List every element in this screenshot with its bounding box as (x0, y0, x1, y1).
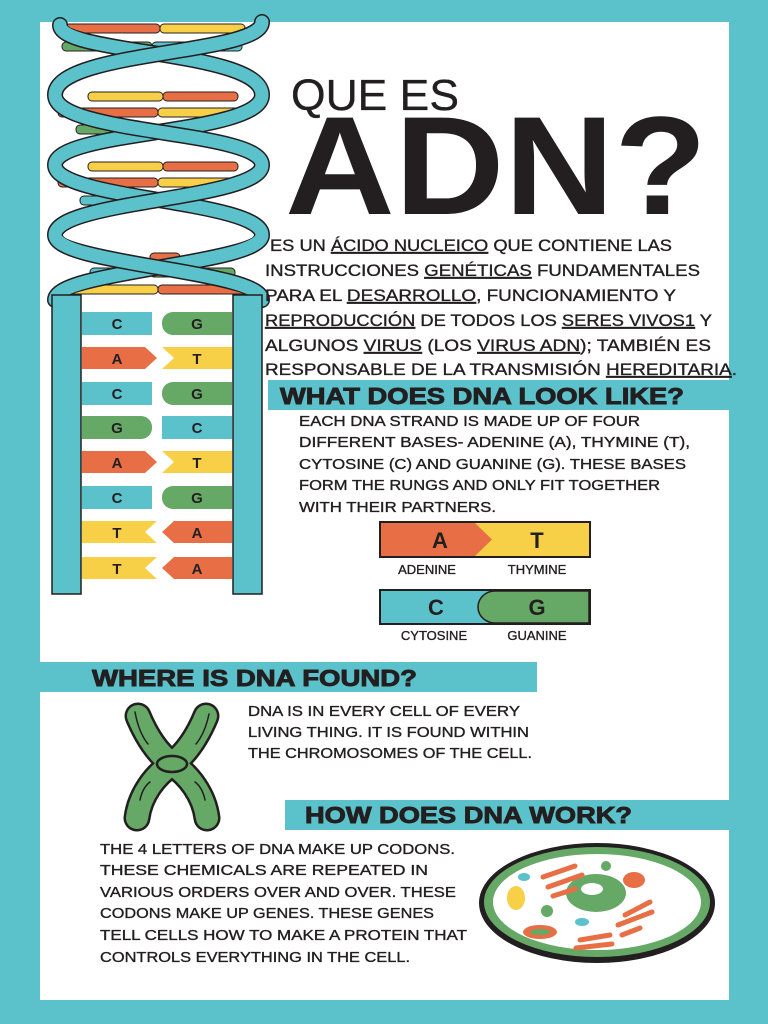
diagram: C-G pair: GUANINE (507, 628, 567, 643)
ladder rungs: G (191, 316, 203, 333)
text block: bases: DIFFERENT BASES- ADENINE (A), THYMINE (T), (299, 435, 690, 451)
ladder rungs: C (112, 316, 123, 333)
diagram: A-T pair: ADENINE (398, 562, 456, 577)
ladder rungs: G (111, 420, 123, 437)
text block: bases: FORM THE RUNGS AND ONLY FIT TOGETHER (299, 478, 660, 494)
text block: how (100, 842, 467, 966)
text block: how: CODONS MAKE UP GENES. THESE GENES (100, 906, 434, 922)
ladder rungs: C (192, 420, 203, 437)
heading: what does DNA look like: WHAT DOES DNA LOOK LIKE? (280, 383, 684, 409)
icon: chromosome (135, 712, 209, 818)
heading: how does DNA work (285, 800, 729, 830)
diagram: A-T pair: T (530, 528, 544, 553)
text block: how: THESE CHEMICALS ARE REPEATED IN (100, 863, 428, 879)
ladder rungs (82, 312, 232, 579)
ladder rungs: G (191, 490, 203, 507)
heading: where is DNA found (40, 662, 537, 692)
ladder rungs: T (112, 525, 122, 542)
ladder rungs: A (192, 561, 203, 578)
ladder rungs: C (112, 490, 123, 507)
ladder rungs: A (112, 351, 123, 368)
text block: definition (265, 236, 737, 379)
ladder rungs: T (192, 455, 202, 472)
text block: definition: RESPONSABLE DE LA TRANSMISIÓN HEREDITARIA . (265, 360, 737, 379)
text block: where: LIVING THING. IT IS FOUND WITHIN (248, 725, 529, 741)
helix rungs (58, 24, 258, 294)
text block: bases (299, 414, 690, 516)
helix strands (55, 22, 262, 300)
ladder rungs: A (112, 455, 123, 472)
text block: definition: PARA EL DESARROLLO , FUNCIONAMIENTO Y (265, 286, 676, 305)
text block: bases: CYTOSINE (C) AND GUANINE (G). THESE BASES (299, 457, 686, 473)
diagram: C-G pair: C (428, 595, 444, 620)
text block: where: THE CHROMOSOMES OF THE CELL. (248, 746, 532, 762)
diagram: C-G pair: CYTOSINE (401, 628, 467, 643)
text block: definition: ALGUNOS VIRUS (LOS VIRUS ADN ); TAMBIÉN ES (265, 336, 711, 355)
text block: how: VARIOUS ORDERS OVER AND OVER. THESE (100, 885, 456, 901)
diagram: C-G pair: G (528, 595, 546, 620)
heading: what does DNA look like (268, 380, 729, 410)
heading: where is DNA found: WHERE IS DNA FOUND? (92, 665, 417, 691)
ladder rails (52, 295, 81, 594)
ladder rungs: T (112, 561, 122, 578)
ladder rungs: A (192, 525, 203, 542)
diagram: C-G pair (380, 590, 590, 643)
ladder rungs: G (191, 386, 203, 403)
title: ADN? (285, 87, 707, 244)
text block: definition: REPRODUCCIÓN DE TODOS LOS SERES VIVOS1 Y (265, 311, 712, 330)
text block: bases: EACH DNA STRAND IS MADE UP OF FOUR (299, 414, 640, 430)
text block: where: DNA IS IN EVERY CELL OF EVERY (248, 704, 520, 720)
ladder rungs: C (112, 386, 123, 403)
title: QUE ES (291, 71, 459, 120)
icon: DNA double helix and ladder (52, 22, 262, 594)
text block: how: THE 4 LETTERS OF DNA MAKE UP CODONS. (100, 842, 455, 858)
text block: definition: INSTRUCCIONES GENÉTICAS FUNDAMENTALES (265, 261, 700, 280)
text block: how: TELL CELLS HOW TO MAKE A PROTEIN THAT (100, 928, 467, 944)
text block: how: CONTROLS EVERYTHING IN THE CELL. (100, 950, 410, 966)
text block: where (248, 704, 532, 762)
diagram: A-T pair: THYMINE (508, 562, 567, 577)
diagram: A-T pair: A (432, 528, 448, 553)
diagram: A-T pair (380, 522, 590, 577)
ladder rungs: T (192, 351, 202, 368)
icon: cell (479, 843, 715, 963)
heading: how does DNA work: HOW DOES DNA WORK? (305, 802, 632, 828)
text block: bases: WITH THEIR PARTNERS. (299, 500, 496, 516)
text block: definition: ES UN ÁCIDO NUCLEICO QUE CONTIENE LAS (270, 236, 672, 255)
